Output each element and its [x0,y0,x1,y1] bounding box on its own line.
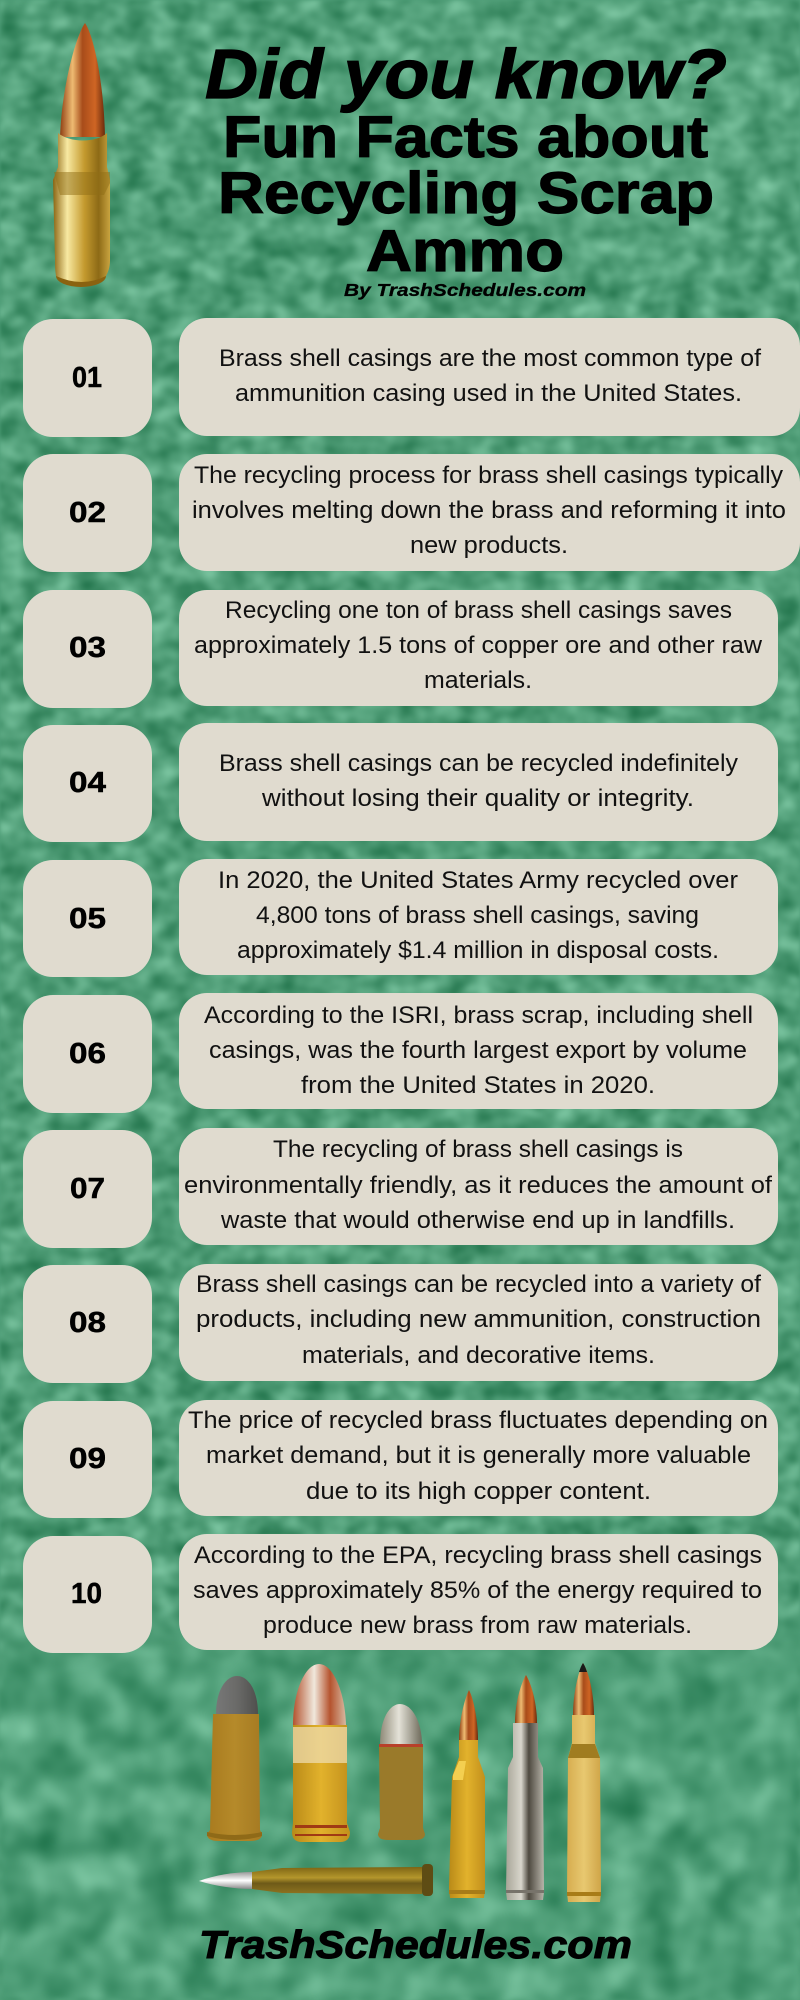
number badge 01: 01 [72,362,102,394]
fact text 01: ammunition casing used in the United States. [235,380,742,407]
icon: nickel rifle cartridge [506,1675,544,1900]
icon: copper-tip cartridge [292,1664,350,1842]
title line: did you know: Did you know? [205,35,727,113]
fact text 06: casings, was the fourth largest export by volume [209,1037,747,1064]
footer website: TrashSchedules.com [199,1924,632,1967]
number badge 03 [23,590,152,708]
fact text 10: produce new brass from raw materials. [263,1612,692,1639]
fact row 07 [23,1128,778,1248]
fact text 05 [179,859,778,975]
icon: silver-tip cartridge [378,1704,425,1840]
fact text 01: Brass shell casings are the most common type of [219,345,761,372]
fact text 02 [179,454,800,571]
fact text 09 [179,1400,778,1516]
number badge 02: 02 [69,497,106,529]
fact text 10 [179,1534,778,1650]
number badge 09: 09 [69,1443,106,1475]
fact text 08 [179,1264,778,1381]
fact text 03 [179,590,778,706]
fact row 01 [23,318,800,437]
fact text 08: Brass shell casings can be recycled into a variety of [196,1271,761,1298]
number badge 06 [23,995,152,1113]
fact text 01 [179,318,800,436]
fact text 04: Brass shell casings can be recycled indefinitely [219,750,738,777]
icon: long tan rifle cartridge [567,1663,601,1902]
fact text 06: from the United States in 2020. [301,1072,655,1099]
fact text 02: new products. [410,532,568,559]
fact text 06: According to the ISRI, brass scrap, including shell [204,1002,753,1029]
number badge 05 [23,860,152,977]
number badge 01 [23,319,152,437]
title line: recycling scrap: Recycling Scrap [218,161,714,226]
fact text 07: The recycling of brass shell casings is [273,1136,683,1163]
fact text 07: waste that would otherwise end up in landfills. [220,1207,735,1234]
fact text 04 [179,723,778,841]
fact text 05: 4,800 tons of brass shell casings, saving [256,902,699,929]
icon: slim brass rifle cartridge [449,1690,485,1898]
fact text 05: In 2020, the United States Army recycled over [218,867,738,894]
number badge 08: 08 [69,1307,106,1339]
fact text 08: materials, and decorative items. [302,1342,655,1369]
fact text 07: environmentally friendly, as it reduces the amount of [184,1172,772,1199]
number badge 05: 05 [69,903,106,935]
number badge 04: 04 [69,767,106,799]
number badge 04 [23,725,152,842]
number badge 06: 06 [69,1038,106,1070]
number badge 03: 03 [69,632,106,664]
fact text 05: approximately $1.4 million in disposal costs. [237,937,719,964]
number badge 10: 10 [71,1578,102,1610]
fact row 02 [23,454,800,572]
fact text 09: market demand, but it is generally more valuable [206,1442,751,1469]
fact row 03 [23,590,778,708]
byline: By TrashSchedules.com [344,280,586,300]
fact row 10 [23,1534,778,1653]
icon: horizontal cartridge [199,1864,433,1896]
number badge 09 [23,1401,152,1518]
title [205,35,727,284]
fact text 02: The recycling process for brass shell casings typically [194,462,783,489]
number badge 08 [23,1265,152,1383]
fact text 09: due to its high copper content. [306,1478,651,1505]
fact text 09: The price of recycled brass fluctuates depending on [188,1407,768,1434]
fact text 10: saves approximately 85% of the energy required to [193,1577,762,1604]
number badge 07 [23,1130,152,1248]
fact text 04: without losing their quality or integrity. [261,785,694,812]
title line: fun facts about: Fun Facts about [223,105,708,170]
fact row 04 [23,723,778,842]
fact text 03: approximately 1.5 tons of copper ore and other raw [194,632,763,659]
fact text 08: products, including new ammunition, construction [196,1306,761,1333]
icon: rifle cartridge [53,23,110,287]
number badge 02 [23,454,152,572]
fact text 07 [179,1128,778,1245]
title line: ammo: Ammo [366,219,564,284]
fact row 05 [23,859,778,977]
number badge 10 [23,1536,152,1653]
cartridge illustrations [199,1663,601,1902]
fact row 09 [23,1400,778,1518]
fact text 02: involves melting down the brass and reforming it into [192,497,786,524]
icon: lead-tip cartridge [207,1676,262,1841]
fact text 03: Recycling one ton of brass shell casings saves [225,597,732,624]
number badge 07: 07 [70,1173,105,1205]
fact text 10: According to the EPA, recycling brass shell casings [194,1542,762,1569]
fact text 03: materials. [424,667,532,694]
fact text 06 [179,993,778,1109]
fact row 06 [23,993,778,1113]
fact row 08 [23,1264,778,1383]
